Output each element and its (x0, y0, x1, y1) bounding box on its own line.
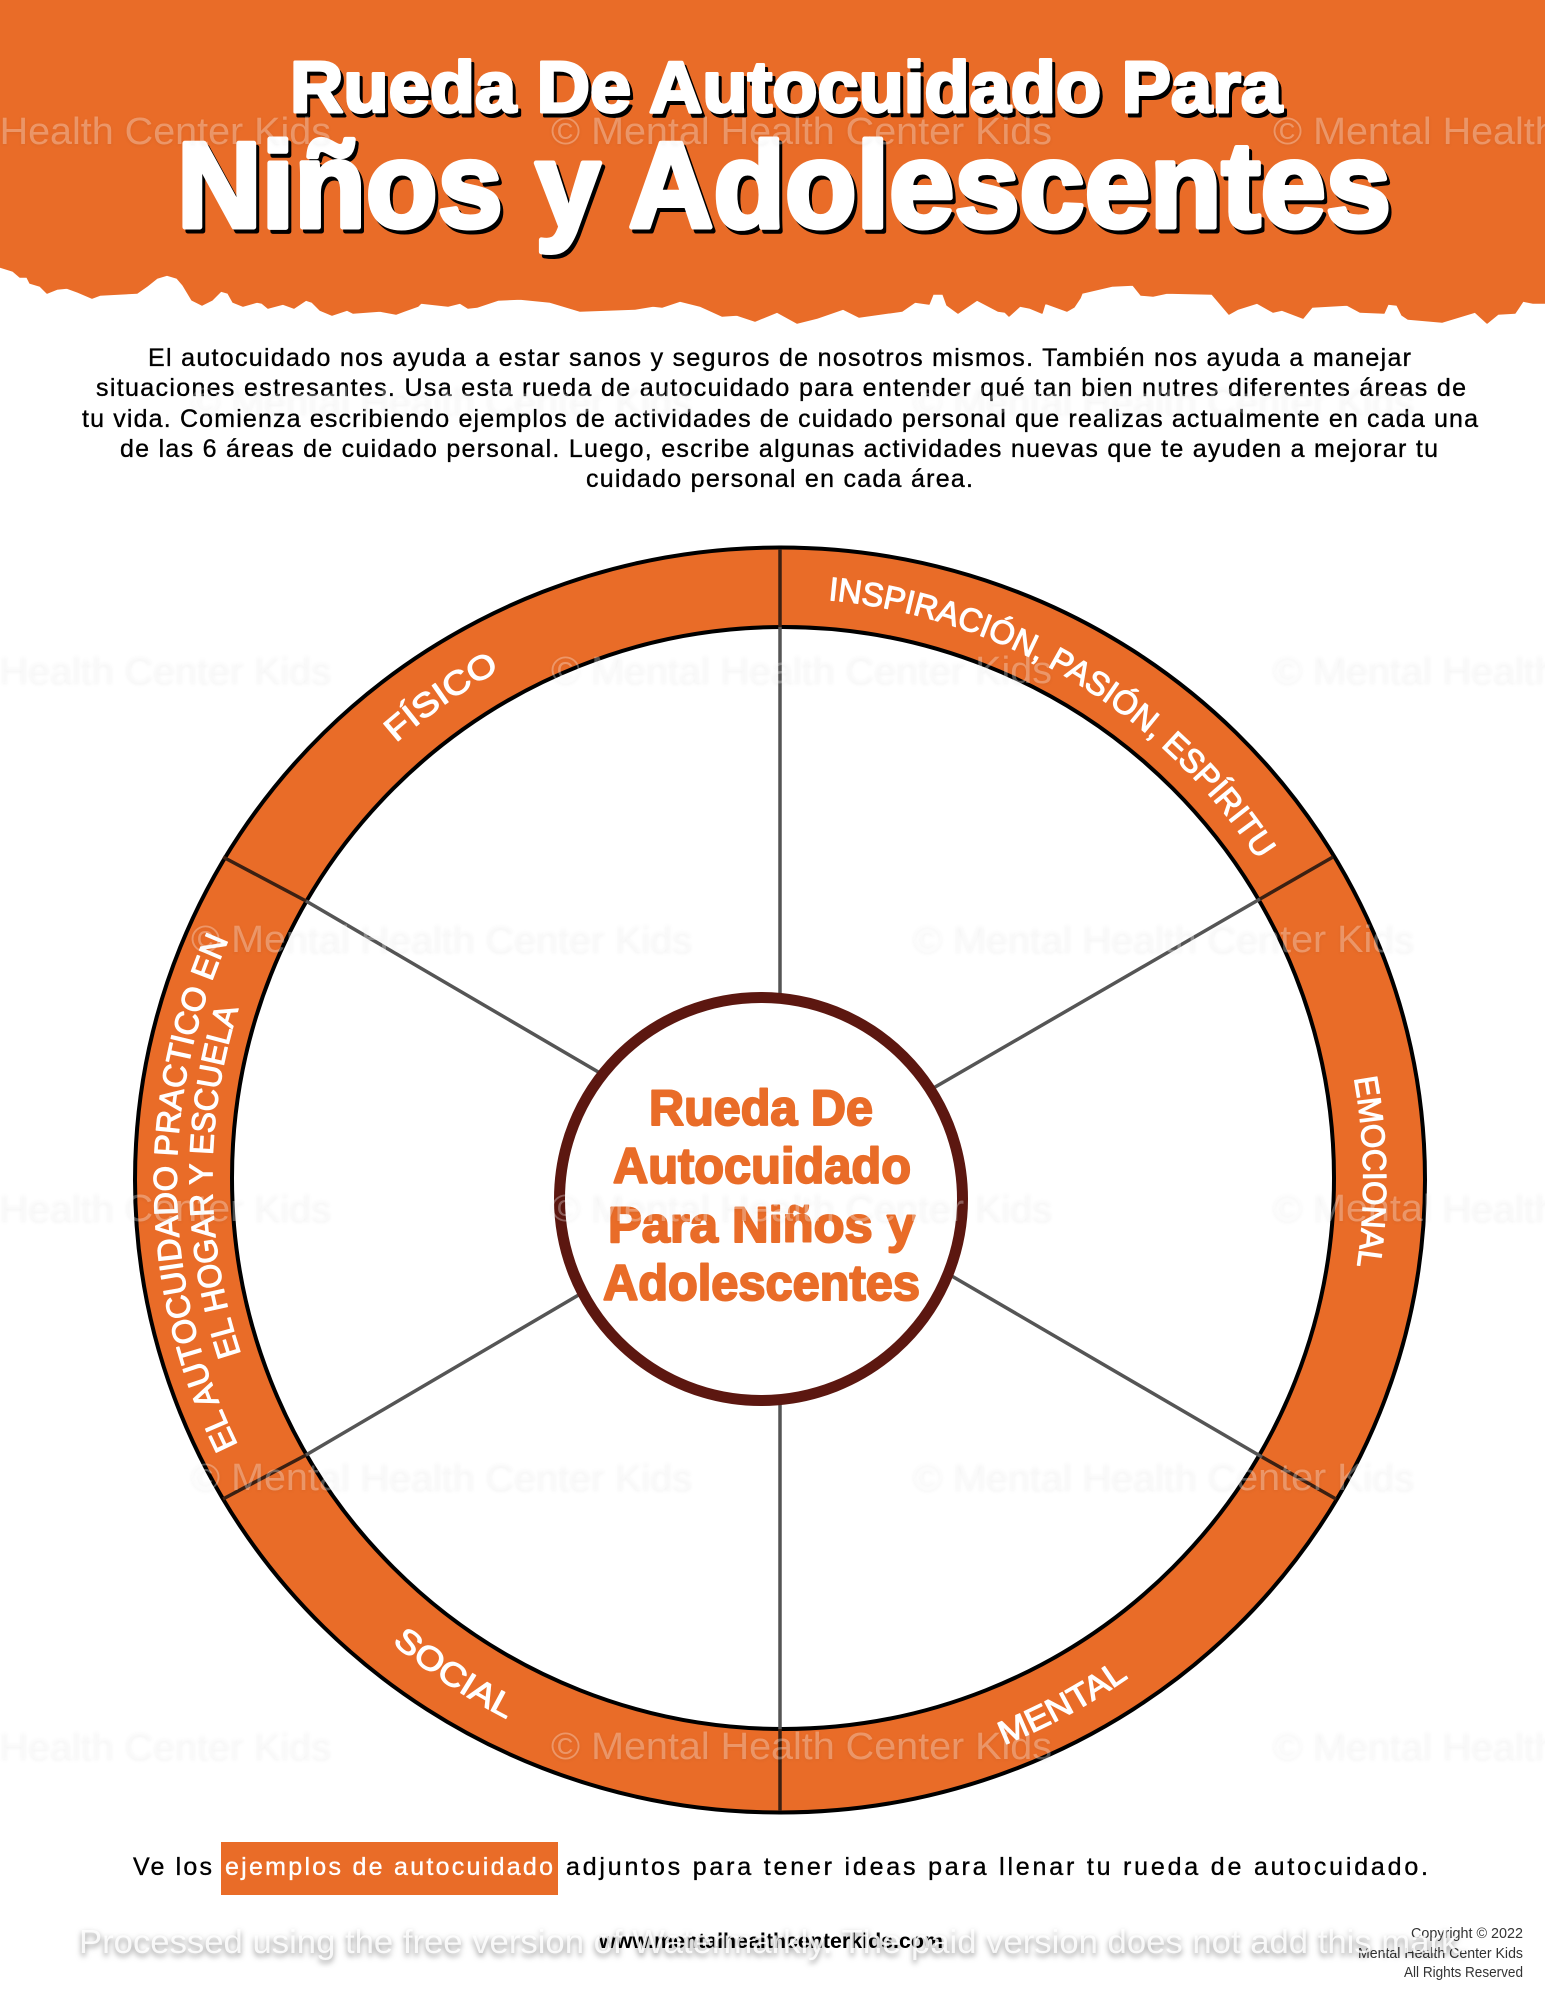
repeated watermarks: © Mental Health Center Kids (191, 1457, 692, 1499)
intro text block: tu vida. Comienza escribiendo ejemplos de actividades de cuidado personal que realizas actualmente en cada una (82, 405, 1478, 433)
intro text block: El autocuidado nos ayuda a estar sanos y seguros de nosotros mismos. También nos ayuda a manejar (148, 344, 1411, 372)
highlight box (221, 1842, 558, 1895)
panel: orange header with torn edge (0, 0, 1545, 323)
copyright: Mental Health Center Kids (1358, 1946, 1523, 1962)
closing sentence: adjuntos para tener ideas para llenar tu rueda de autocuidado. (566, 1853, 1428, 1881)
intro text block: de las 6 áreas de cuidado personal. Luego, escribe algunas actividades nuevas que te ayuden a mejorar tu (120, 435, 1438, 463)
repeated watermarks: © Mental Health Center Kids (191, 381, 692, 423)
website url: www.mentalhealthcenterkids.com (598, 1930, 943, 1953)
repeated watermarks: © Mental Health Center Kids (913, 381, 1414, 423)
wheel spokes (306, 627, 1262, 1729)
closing sentence: ejemplos de autocuidado (225, 1853, 553, 1881)
copyright: All Rights Reserved (1404, 1965, 1523, 1981)
center hub: Autocuidado (613, 1138, 911, 1194)
label: autocuidado practico: EL AUTOCUIDADO PRACTICO EN (153, 932, 238, 1453)
label: autocuidado practico: EL HOGAR Y ESCUELA (189, 1008, 241, 1359)
center hub (560, 998, 962, 1400)
label: inspiración: INSPIRACIÓN, PASIÓN, ESPÍRITU (830, 577, 1276, 856)
label: mental: MENTAL (997, 1666, 1128, 1744)
center hub: Rueda De (649, 1080, 873, 1136)
label: social: SOCIAL (395, 1629, 508, 1720)
repeated watermarks: © Mental Health Center Kids (913, 1457, 1414, 1499)
repeated watermarks: © Mental Health Center Kids (191, 919, 692, 961)
repeated watermarks: © Mental Health Center Kids (551, 111, 1052, 153)
closing sentence: Ve los (133, 1853, 212, 1881)
center hub: Adolescentes (603, 1255, 920, 1311)
wheel inner field (232, 627, 1334, 1729)
intro text block (82, 344, 1478, 493)
intro text block: cuidado personal en cada área. (586, 465, 973, 493)
copyright (1358, 1926, 1523, 1981)
ring dividers (223, 549, 1336, 1811)
label: emocional: EMOCIONAL (1354, 1076, 1387, 1266)
closing sentence (133, 1842, 1428, 1895)
self-care wheel (133, 546, 1427, 1814)
title: Niños y Adolescentes (177, 117, 1391, 253)
copyright: Copyright © 2022 (1411, 1926, 1523, 1942)
wheel outer ring (135, 548, 1425, 1812)
title: Rueda De Autocuidado Para (290, 48, 1283, 128)
title (177, 48, 1391, 253)
center hub: Para Niños y (608, 1197, 915, 1253)
label: físico: FÍSICO (383, 654, 495, 742)
repeated watermarks: © Mental Health Center Kids (551, 1188, 1052, 1230)
repeated watermarks: © Mental Health Center Kids (913, 919, 1414, 961)
processing notice watermark: Processed using the free version of Watermarkly. The paid version does not add this mark. (79, 1923, 1468, 1960)
intro text block: situaciones estresantes. Usa esta rueda de autocuidado para entender qué tan bien nutres diferentes áreas de (96, 374, 1466, 402)
repeated watermarks: © Mental Health Center Kids (551, 1726, 1052, 1768)
repeated watermarks: © Mental Health Center Kids (551, 650, 1052, 692)
